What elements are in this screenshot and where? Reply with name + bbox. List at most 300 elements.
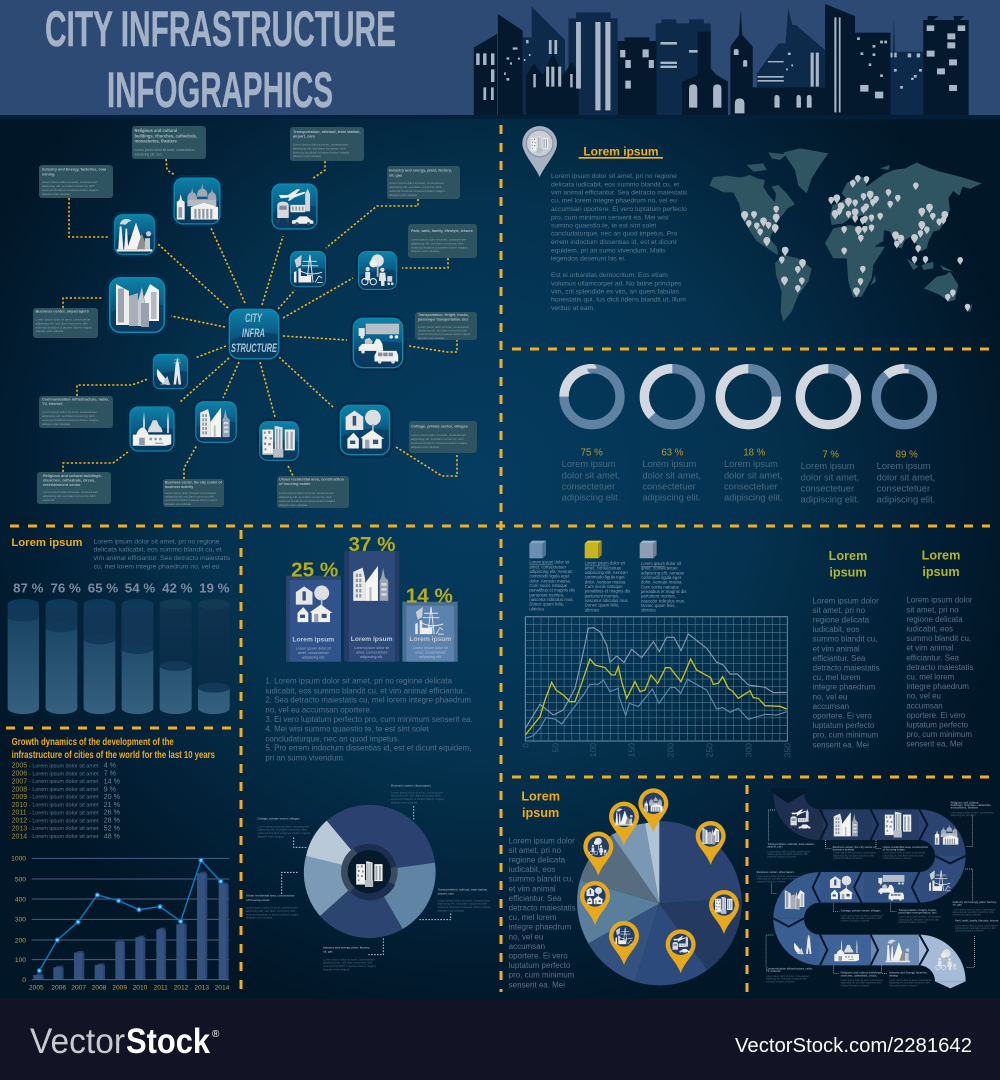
footer band [0,999,1000,1080]
snake timeline labels: adipiscing elit, sed diam nonummy nibh [833,854,875,857]
snake timeline labels: Lorem ipsum dolor sit amet, consectetuer [767,850,810,853]
hub tile: city infrastructure: INFRA [242,326,265,340]
callout: business city center: adipiscing elit, sed diam nonummy nibh [165,495,214,499]
combo chart: 1000 [11,856,26,863]
ring chart labels: adipiscing elit, sed diam nonummy nibh [391,794,441,798]
yearly list: - Lorem ipsum dolor sit amet [29,834,99,840]
snake timeline labels: business activity [833,848,855,852]
callout: communication: TV, Internet [42,402,63,406]
callout: business city center: euismod tincidunt ut laoreet dolore magna [165,498,218,502]
snake timeline labels: Lorem ipsum dolor sit amet, consectetuer [955,924,998,927]
callout: skyscrapers: Lorem ipsum dolor sit amet, consectetuer [36,318,91,322]
callout: industry: aliquam erat volutpat. [42,192,71,196]
watermark logo: Vector [30,1022,125,1061]
line chart: 250 [704,743,714,757]
yearly list: 2013 [12,825,27,832]
cylinder chart: 76 % [50,581,81,596]
donut labels: dolor sit amet, [877,472,935,482]
ring chart labels: euismod tincidunt ut laoreet dolore magna [257,831,310,835]
legend text: commodo ligula eget [529,574,570,579]
snake timeline labels: euismod tincidunt ut laoreet [767,856,796,859]
donut labels: consectetuer [562,481,615,491]
heading: Lorem ipsum [11,537,82,549]
snake timeline labels: Lorem ipsum dolor sit amet, consectetuer [766,975,809,978]
ring chart labels: Lorem ipsum dolor sit amet, consectetuer [438,898,490,902]
percent bar: 37 %: adipiscing elit. [360,655,383,659]
callout: religious [132,126,206,159]
snake timeline labels: buildings, churches, cathedrals, [951,803,992,807]
snake timeline labels [757,800,999,987]
panel: city infrastructure network [33,126,477,508]
numbered list: iudicabit, eos summo blandit cu, et vim animal efficiantur. [265,686,465,695]
callout: urban residential: adipiscing elit, sed diam nonummy nibh [279,495,332,499]
callout: freight [415,312,477,340]
callout: business city center: business activity [165,485,193,489]
callout: energy: Lorem ipsum dolor sit amet, consectetuer [389,181,444,185]
callout: transportation railroad: adipiscing elit, sed diam nonummy nibh [293,146,346,150]
callout: skyscrapers: adipiscing elit, sed diam nonummy nibh [36,321,88,325]
donut labels [562,447,935,505]
donut labels: Lorem ipsum [642,459,696,469]
callout: cottage: Cottage, private sector, villages [411,424,468,428]
legend text: amet, consectetuer [585,565,622,570]
ring chart labels: adipiscing elit, sed diam nonummy nibh [438,902,487,906]
percent bar: 14 %: Lorem ipsum [409,636,451,643]
ring chart labels: Lorem ipsum dolor sit amet, consectetuer [246,906,298,910]
snake timeline labels: passenger transportation, bus [898,911,937,915]
yearly list: 2011 [12,810,27,817]
percent bar: 37 % [344,533,399,662]
callout: industry [39,165,113,198]
legend text: Donec quam felis, [641,603,676,608]
combo chart: 400 [15,896,26,903]
percent bar: 37 %: Lorem ipsum dolor sit [354,646,389,650]
percent bar: 14 % [402,584,458,662]
callout: communication: aliquam erat volutpat. [42,422,71,426]
legend text [529,560,686,613]
yearly list: 2005 [12,763,27,770]
column 1: no, vel eu [813,692,847,701]
donut labels: dolor sit amet, [801,472,859,482]
column 2: Lorem [922,548,960,562]
city skyline [474,4,969,115]
yearly list: 26 % [104,809,121,817]
body text: delicata iudicabit, eos summo blandit cu, et [551,181,679,188]
line chart: 100 [588,743,598,757]
callout: business city center: Business center, the city center of [165,480,223,484]
heading: ipsum [522,806,559,820]
ring chart labels: airport, cars [438,891,454,895]
column 2: cu, mel lorem [906,672,955,681]
hub tile: city infrastructure [226,306,282,362]
icon tile: religious [171,175,223,227]
callout: religious buildings 2: Lorem ipsum dolor sit amet, consectetuer [43,490,98,494]
legend text: penatibus et magnis dis [529,588,575,593]
callout: park: euismod tincidunt ut laoreet dolore magna [411,245,467,249]
legend text: Lorem ipsum [529,560,553,566]
ring chart labels: Business center, skyscrapers [391,784,431,788]
combo chart: 2009 [112,985,127,992]
icon tile: energy [288,249,328,289]
column 1: efficiantur. Sea [813,654,866,663]
yearly list: - Lorem ipsum dolor sit amet [29,810,99,816]
intro text: vim animal efficiantur. Sea detracto maiestatis [94,555,231,562]
combo chart: 2006 [51,985,66,992]
ring chart labels: Transportation, railroad, train station, [438,887,488,891]
panel: world map section [522,126,982,322]
callout: communication: Communication infrastructure, radio, [42,398,109,402]
body text: accumsan oportere. Ei vero luptatum perfecto [551,206,687,213]
callout: industry: Industry and Energy, factories, coal [42,168,106,172]
yearly list: 7 % [104,770,117,778]
donut labels: dolor sit amet, [562,470,620,480]
ring chart labels: aliquam erat volutpat. [391,800,418,804]
legend text: dolor. Aenean massa. [641,580,683,585]
callout: energy [387,166,460,199]
column 2 [906,548,973,749]
heading: Lorem [521,789,560,803]
donut labels: adipiscing elit. [724,493,783,503]
yearly list: 2009 [12,794,27,801]
line chart: 300 [743,743,753,757]
legend text: ultricies [641,608,656,613]
yearly list: 21 % [104,801,121,809]
yearly list: 9 % [104,785,117,793]
combo chart: 300 [15,917,26,924]
ring chart labels: oil, gas [323,950,333,954]
donut labels: consectetuer [801,483,854,493]
donut labels: 75 % [581,447,603,458]
body text: honestatis qui. Ius dicit ridens blandit ut, illum [551,297,686,304]
column 1: pro, cum minimum [813,731,879,740]
line chart: 50 [550,743,560,753]
percent bar: 14 %: Lorem ipsum dolor sit [413,646,448,650]
callout: religious buildings 2: adipiscing elit, sed diam nonummy nibh [43,494,96,498]
icon tile: trucks [350,315,406,371]
panel: pie chart and snake timeline [509,788,999,989]
column 1: iudicabit, eos [813,625,859,634]
body text: oportere. Ei vero [509,952,568,961]
percent bar: 37 %: amet, consectetuer [356,650,388,654]
percent bar: 25 %: Lorem ipsum [292,637,334,644]
column 2: regione delicata [906,615,963,624]
donut labels: 63 % [661,447,684,458]
ring chart labels: Industry and energy, plant, factory, [323,945,370,949]
donut labels: Lorem ipsum [877,461,931,471]
column 1: Lorem [829,549,867,563]
column 1: Lorem ipsum dolor [813,596,879,605]
column 1: integre phaedrum [813,683,876,692]
callout: business city center: Lorem ipsum dolor sit amet, consectetuer [165,491,216,495]
legend text: parturient montes, [641,594,676,599]
body text: volumus ullamcorper ad. No latine principes [551,280,682,287]
donut 7 % [800,369,856,425]
intro text: Lorem ipsum dolor sit amet, pri no regione [94,538,220,545]
percent bar: 37 %: 37 % [348,533,396,556]
combo chart: 200 [15,937,26,944]
yearly list: 20 % [104,793,121,801]
snake timeline labels: Park, walk, family, lifestyle, leisure [955,919,999,923]
percent bar: 14 %: 14 % [406,584,453,607]
callout: business city center [163,479,224,507]
snake timeline labels: Business center, the city center of [833,845,876,849]
title: INFOGRAPHICS [107,62,333,118]
callout: cottage: euismod tincidunt ut laoreet dolore magna [411,441,467,445]
callout: religious: Religious and cultural [134,128,177,133]
snake timeline labels: Lorem ipsum dolor sit amet, consectetuer [833,852,876,855]
legend text: nascetur ridiculus mus. [529,597,574,602]
body text: legendos deserunt his ei. [551,256,626,263]
snake timeline labels: Transportation, railroad, train station, [767,842,815,846]
combo chart: 0 [22,977,26,984]
callout: freight: adipiscing elit, sed diam nonummy nibh [418,329,467,333]
callout: freight: passenger transportation, bus [418,317,468,321]
numbered list: concludaturque, nec an quod impetus. [265,734,400,743]
body text: cu, mel lorem [509,913,557,922]
hub tile: city infrastructure: CITY [245,311,263,325]
numbered list: no, vel eu accumsan oportere. [265,705,372,714]
ring chart labels: adipiscing elit, sed diam nonummy nibh [246,909,296,913]
column 2: summo blandit cu, [906,634,971,643]
header band [0,0,1000,119]
callout: park: adipiscing elit, sed diam nonummy nibh [411,241,464,245]
line chart: 150 [626,743,636,757]
snake timeline labels: adipiscing elit, sed diam nonummy nibh [898,918,940,921]
snake timeline labels: Urban residential area, construction [883,845,929,849]
numbered list: 3. Ei vero luptatum perfecto pro, cum minimum senserit ea. [265,715,473,724]
donut labels: dolor sit amet, [724,470,783,480]
heading: Lorem ipsum [583,145,659,159]
legend text: dolor. Aenean massa. [529,578,571,583]
ring chart labels: euismod tincidunt ut laoreet dolore magna [323,964,376,968]
ring chart labels: euismod tincidunt ut laoreet dolore magna [391,797,444,801]
body text: equidem, pri an sumo vivendum. Malis [551,247,666,254]
snake timeline labels: adipiscing elit, sed diam nonummy nibh [766,978,807,981]
snake timeline labels: Lorem ipsum dolor sit amet, consectetuer [953,908,996,911]
percent bar: 14 %: amet, consectetuer [415,650,447,654]
body text: vim, zril splendide ex vim, an quem fabulas [551,288,680,295]
ring chart labels: aliquam erat volutpat. [323,967,350,971]
title [45,1,396,118]
snake timeline labels: adipiscing elit, sed diam nonummy nibh [883,854,924,857]
snake timeline labels: Cottage, private sector, villages [841,909,881,913]
yearly list: 2006 [12,771,27,778]
legend text: adipiscing elit. Aenean [529,569,573,574]
callout: communication [39,396,113,428]
cylinder chart: 42 % [162,581,193,596]
column 1: ipsum [829,566,867,580]
world map [709,148,982,322]
combo chart: 2014 [215,985,230,992]
yearly list: 4 % [104,762,117,770]
callout: park: aliquam erat volutpat. [411,249,440,253]
legend text: Lorem ipsum [641,561,665,567]
legend text: Lorem ipsum [585,561,609,567]
snake timeline labels: adipiscing elit, sed diam nonummy nibh [955,927,996,930]
cylinder chart: 19 % [199,581,230,596]
column 2: no, vel eu [906,692,941,701]
column 1: et vim animal [813,644,860,653]
cylinder chart: 54 % [125,581,155,596]
snake timeline labels: Communication infrastructure, radio, [766,966,813,970]
yearly list: 2014 [12,833,27,840]
yearly list: 52 % [104,824,121,832]
body text: Lorem ipsum dolor [509,836,575,845]
body text: vim animal efficiantur. Sea detracto maiestatis [551,189,688,196]
legend text: penatibus et magnis dis [641,589,686,594]
callout: religious buildings 2: churches, cathedrals, circus, [43,479,95,483]
column 2: iudicabit, eos [906,624,953,633]
callout: skyscrapers: aliquam erat volutpat. [36,329,64,333]
callout: transportation railroad: Transportation, railroad, train station, [293,130,361,134]
callout: communication: adipiscing elit, sed diam nonummy nibh [42,414,95,418]
callout: industry: euismod tincidunt ut laoreet dolore magna [42,188,98,192]
column 1: regione delicata [813,616,870,625]
legend text: nascetur ridiculus mus. [641,598,685,603]
percent bar: 25 %: adipiscing elit. [302,656,325,660]
yearly list: 28 % [104,817,121,825]
body text: errem indoctum dissentias id, est et dicunt [551,239,677,246]
legend text: ultricies [529,606,544,611]
ring chart labels: Urban residential area, construction [246,894,295,898]
snake timeline labels: euismod tincidunt ut laoreet [955,930,984,933]
line chart: 200 [665,743,675,757]
legend text: Donec quam felis, [585,603,619,608]
icon tile: park [356,249,399,292]
callout: transportation railroad [290,127,364,161]
body text: accumsan [509,942,545,951]
callout: energy: euismod tincidunt ut laoreet dolore magna [389,189,445,193]
callout: industry: Lorem ipsum dolor sit amet, consectetuer [42,180,97,184]
combo chart: 100 [15,957,26,964]
donut labels: adipiscing elit. [642,493,701,503]
donut labels: consectetuer [642,481,696,491]
callout: urban residential: euismod tincidunt ut laoreet dolore magna [279,499,335,503]
body text: Lorem ipsum dolor sit amet, pri no regione [551,173,677,180]
snake timeline labels: Lorem ipsum dolor sit amet, consectetuer [841,914,884,917]
icon tile: industry [112,212,157,257]
numbered list: 4. Mei wisi summo quaestio te, te est sint solet [265,725,429,734]
donut labels: adipiscing elit. [801,495,859,505]
callout: urban residential: Urban residential area, construction [279,478,345,482]
snake timeline labels: mining [889,973,898,977]
body text: integre phaedrum [509,923,572,932]
icon tile: business center [193,399,239,445]
snake timeline labels: euismod tincidunt ut laoreet [889,984,918,987]
column 1: summo blandit cu, [813,635,877,644]
yearly list: - Lorem ipsum dolor sit amet [29,826,99,832]
snake timeline labels: Lorem ipsum dolor sit amet, consectetuer [898,916,941,919]
numbered list: 5. Pro errem indoctum dissentias id, est et dicunt equidem, [265,744,471,753]
legend text: dolor sit [666,561,682,566]
column 1: oportere. Ei vero [813,712,872,721]
column 2: detracto maiestatis [906,663,973,672]
callout: cottage [409,421,477,453]
snake timeline labels: euismod tincidunt ut laoreet [766,980,795,983]
pie map pins [580,788,739,973]
panel: cylinders and percent bars [8,533,473,762]
callout: religious buildings 2: entertainment center [43,483,81,487]
snake timeline labels: Transportation, freight, trucks, [898,908,937,912]
callout: freight: Lorem ipsum dolor sit amet, consectetuer [418,325,469,329]
donut labels: 18 % [743,447,766,458]
callout: religious buildings 2 [37,472,111,504]
legend text: ultricies [585,607,599,612]
callout: energy: adipiscing elit, sed diam nonummy nibh [389,185,442,189]
watermark logo: ® [212,1029,220,1040]
column 2: sit amet, pri no [906,605,959,614]
body text: detracto maiestatis [509,904,576,913]
legend text: parturient montes, [529,592,564,597]
pie chart [577,821,742,985]
callout: industry: mining [42,172,55,176]
legend text: dolor. Aenean massa. [585,579,626,584]
line chart: 0 [520,743,530,748]
cylinder chart [8,581,230,714]
ring chart labels: aliquam erat volutpat. [438,908,465,912]
snake timeline labels: Lorem ipsum dolor sit amet, consectetuer [757,875,800,878]
callout: religious: buildings, churches, cathedrals, [134,133,197,138]
snake timeline labels: airport, cars [767,845,783,849]
numbered list: 2. Sea detracto maiestatis cu, mel lorem integre phaedrum [265,696,471,705]
combo chart: 2013 [194,985,209,992]
intro text: cu, mel lorem integre phaedrum no, vel eu [94,563,220,570]
snake timeline labels: adipiscing elit, sed diam nonummy nibh [757,878,798,881]
callout: urban residential: of housing estate [279,482,310,486]
icon tile: mosque [127,404,177,454]
combo chart: 2005 [29,985,44,992]
body text: sit amet, pri no [509,846,562,855]
legend text: Donec quam felis, [529,602,564,607]
column 2: accumsan [906,701,943,710]
ring chart labels: aliquam erat volutpat. [246,916,273,920]
legend text: adipiscing elit. Aenean [585,570,628,575]
callout: religious: adipiscing elit, sed [134,152,162,156]
hub tile: city infrastructure: STRUCTURE [231,341,278,355]
icon tile: urban [257,419,301,463]
callout: freight: aliquam erat volutpat. [418,336,445,340]
column 2: ipsum [922,565,960,579]
yearly list: - Lorem ipsum dolor sit amet [29,795,99,801]
ring chart labels: euismod tincidunt ut laoreet dolore magna [438,905,491,909]
ring chart labels: adipiscing elit, sed diam nonummy nibh [323,961,373,965]
watermark logo [30,1022,220,1061]
panel: line chart section [520,541,973,757]
ring chart labels [246,784,491,971]
snake timeline [771,788,966,988]
donut labels: 7 % [822,449,839,460]
icon tile: skyscrapers [106,274,168,336]
percent bar: 14 %: adipiscing elit. [419,655,442,659]
snake timeline labels: Industry and energy, plant, factory, [953,900,997,904]
body text: efficiantur. Sea [509,894,562,903]
snake timeline labels: Religious and cultural buildings, [841,971,882,975]
body text: concludaturque, nec an quod impetus. Pro [551,231,678,238]
callout: freight: Transportation, freight, trucks, [418,313,469,317]
callout: energy: oil, gas [389,173,402,177]
body text: summo quaestio te, te est sint solet [551,222,656,229]
snake timeline labels: Lorem ipsum dolor sit amet, consectetuer [883,852,926,855]
snake timeline labels: Lorem ipsum dolor sit amet, consectetuer [841,979,884,982]
numbered list: pri an sumo vivendum. [265,753,345,762]
yearly list: - Lorem ipsum dolor sit amet [29,803,99,809]
callout: park [408,224,477,258]
cylinder chart: 65 % [88,581,118,596]
combo chart: 2010 [133,985,148,992]
callout: industry: adipiscing elit, sed diam nonummy nibh [42,184,95,188]
legend text: penatibus et magnis dis [585,589,630,594]
ring chart labels: euismod tincidunt ut laoreet dolore magna [246,912,299,916]
